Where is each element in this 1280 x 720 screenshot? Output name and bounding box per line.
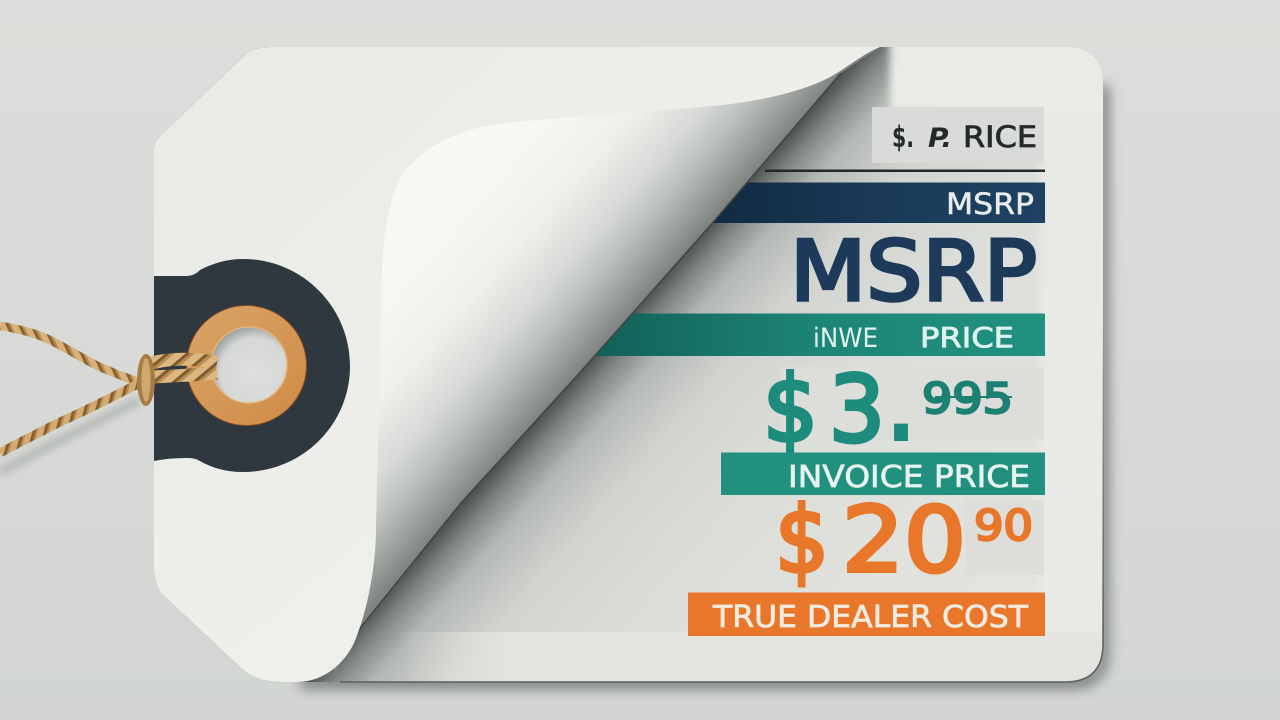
price: $20.90: 90 (974, 501, 1033, 550)
dark eyelet badge (154, 259, 350, 472)
price: $3.995: $ (763, 356, 818, 463)
front face of tag (154, 47, 880, 682)
price: $3.995: 3 (829, 356, 885, 463)
upper strand (0, 326, 140, 382)
teal bar: invoice price label (570, 314, 1045, 356)
price: $20.90: 20 (842, 488, 966, 593)
price: $20.90 (775, 487, 1044, 594)
panel: tag body under the fold (154, 20, 1130, 700)
label block: S.P. RICE: $. (892, 120, 914, 154)
infographic: price tag (0, 47, 1120, 701)
price list panel (570, 107, 1045, 636)
label block: S.P. RICE (872, 107, 1044, 163)
navy bar: MSRP (700, 182, 1045, 223)
price: $3.995 (763, 356, 1044, 463)
price: $20.90: $ (775, 487, 829, 594)
price: $3.995: 995 (922, 374, 1013, 423)
label block: S.P. RICE: RICE (963, 120, 1037, 154)
label block: S.P. RICE: P. (928, 123, 952, 154)
twine (0, 326, 217, 472)
orange bar: TRUE DEALER COST (688, 592, 1045, 636)
teal bar: INVOICE PRICE: INVOICE PRICE (788, 460, 1030, 495)
navy bar: MSRP: MSRP (946, 187, 1034, 221)
lower strand (0, 383, 140, 453)
lower tag edge (340, 300, 1103, 682)
large MSRP heading: MSRP (790, 223, 1037, 320)
folded page corner (300, 47, 880, 672)
teal bar: INVOICE PRICE (721, 452, 1045, 495)
copper washer with hole (186, 306, 306, 426)
tag drop shadow (300, 85, 1110, 690)
teal bar: invoice price label: iNWE (813, 323, 878, 354)
price: $3.995: . (886, 356, 916, 463)
teal bar: invoice price label: PRICE (920, 321, 1014, 354)
twine shadow (0, 400, 140, 472)
loop through eyelet (152, 359, 217, 377)
orange bar: TRUE DEALER COST: TRUE DEALER COST (712, 600, 1029, 635)
knot (137, 354, 155, 406)
